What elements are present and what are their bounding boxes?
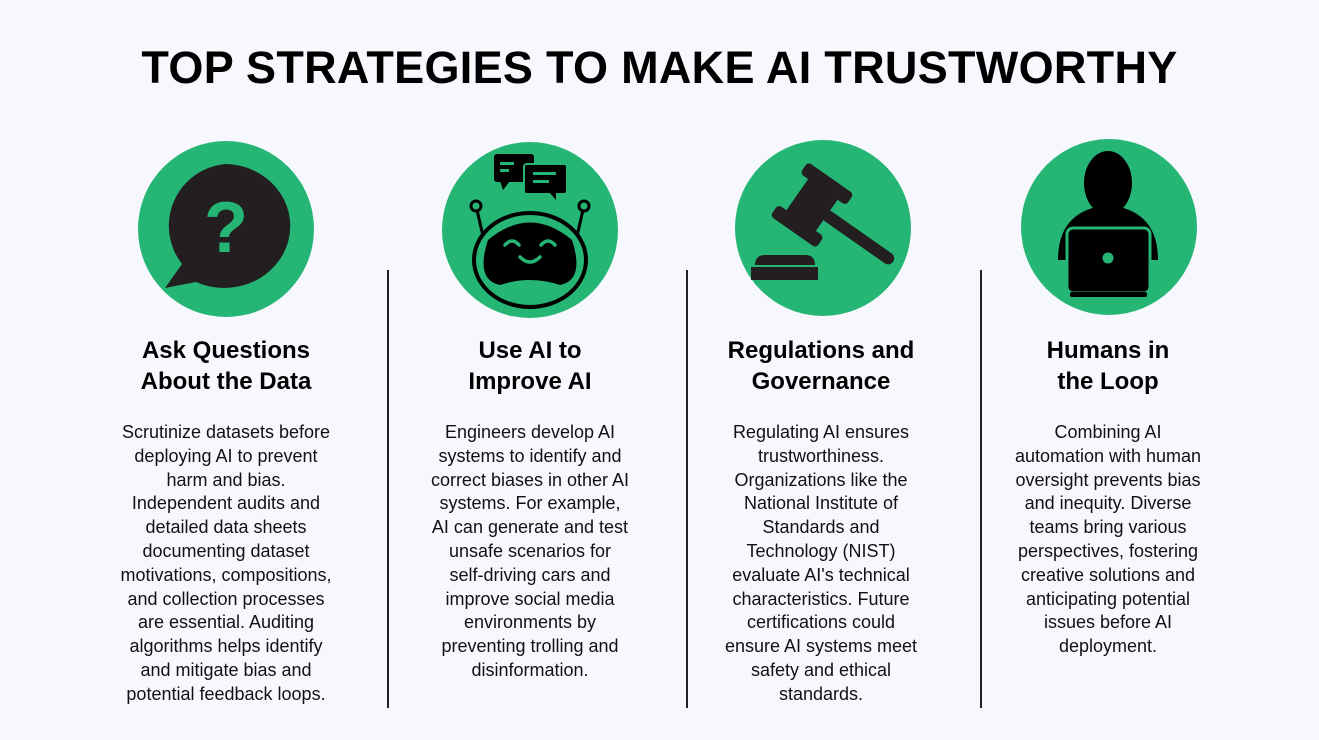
column 4: the Loop — [1057, 368, 1159, 395]
column 3: National Institute of — [744, 493, 898, 513]
column 3: characteristics. Future — [732, 589, 910, 609]
column 2: systems. For example, — [439, 493, 621, 513]
column 4: perspectives, fostering — [1018, 541, 1198, 561]
column 3: safety and ethical — [751, 660, 891, 680]
column 4: deployment. — [1059, 636, 1157, 656]
column 3: evaluate AI's technical — [732, 565, 910, 585]
column 2: preventing trolling and — [441, 636, 619, 656]
column 3: Regulating AI ensures — [733, 422, 909, 442]
icon: human with laptop — [1021, 139, 1197, 315]
column 1: detailed data sheets — [145, 517, 307, 537]
column 3 — [725, 337, 917, 704]
column 4: oversight prevents bias — [1015, 470, 1201, 490]
column 4: Combining AI — [1054, 422, 1162, 442]
column 2: disinformation. — [471, 660, 589, 680]
column 2: AI can generate and test — [432, 517, 628, 537]
column 3: certifications could — [747, 612, 895, 632]
column 2: improve social media — [445, 589, 615, 609]
column 1 — [120, 337, 332, 704]
divider lines — [387, 270, 389, 708]
column 1: About the Data — [141, 368, 311, 395]
column 4: creative solutions and — [1021, 565, 1195, 585]
icon: question bubble: ? — [204, 188, 248, 268]
column 1: Independent audits and — [132, 493, 320, 513]
column 1: Scrutinize datasets before — [122, 422, 330, 442]
icon: gavel — [735, 140, 912, 316]
column 2: unsafe scenarios for — [449, 541, 611, 561]
column 3: Standards and — [762, 517, 880, 537]
column 1: potential feedback loops. — [126, 684, 326, 704]
title: TOP STRATEGIES TO MAKE AI TRUSTWORTHY — [141, 42, 1178, 93]
column 2: self-driving cars and — [449, 565, 611, 585]
column 4: and inequity. Diverse — [1025, 493, 1191, 513]
icon: robot — [442, 142, 618, 318]
column 4: Humans in — [1047, 337, 1169, 364]
column 2: Engineers develop AI — [445, 422, 615, 442]
column 2 — [431, 337, 629, 680]
column 2: Improve AI — [468, 368, 592, 395]
column 4: automation with human — [1015, 446, 1201, 466]
column 1: and collection processes — [127, 589, 325, 609]
column 1: documenting dataset — [142, 541, 310, 561]
column 3: ensure AI systems meet — [725, 636, 917, 656]
column 4: issues before AI — [1044, 612, 1172, 632]
column 1: are essential. Auditing — [138, 612, 314, 632]
column 4 — [1015, 337, 1201, 656]
column 2: correct biases in other AI — [431, 470, 629, 490]
column 3: Technology (NIST) — [746, 541, 896, 561]
column 1: harm and bias. — [166, 470, 286, 490]
column 1: motivations, compositions, — [120, 565, 332, 585]
column 1: Ask Questions — [142, 337, 310, 364]
column 3: Governance — [752, 368, 890, 395]
column 1: algorithms helps identify — [129, 636, 323, 656]
column 3: trustworthiness. — [758, 446, 884, 466]
icons — [138, 139, 1197, 318]
column 1: deploying AI to prevent — [134, 446, 318, 466]
icon: question bubble — [138, 141, 314, 317]
column 2: Use AI to — [478, 337, 582, 364]
column 4: anticipating potential — [1026, 589, 1190, 609]
column 1: and mitigate bias and — [140, 660, 312, 680]
column 3: Regulations and — [728, 337, 914, 364]
column 2: systems to identify and — [438, 446, 622, 466]
column 2: environments by — [464, 612, 596, 632]
column 3: Organizations like the — [734, 470, 908, 490]
column 4: teams bring various — [1029, 517, 1187, 537]
column 3: standards. — [779, 684, 863, 704]
